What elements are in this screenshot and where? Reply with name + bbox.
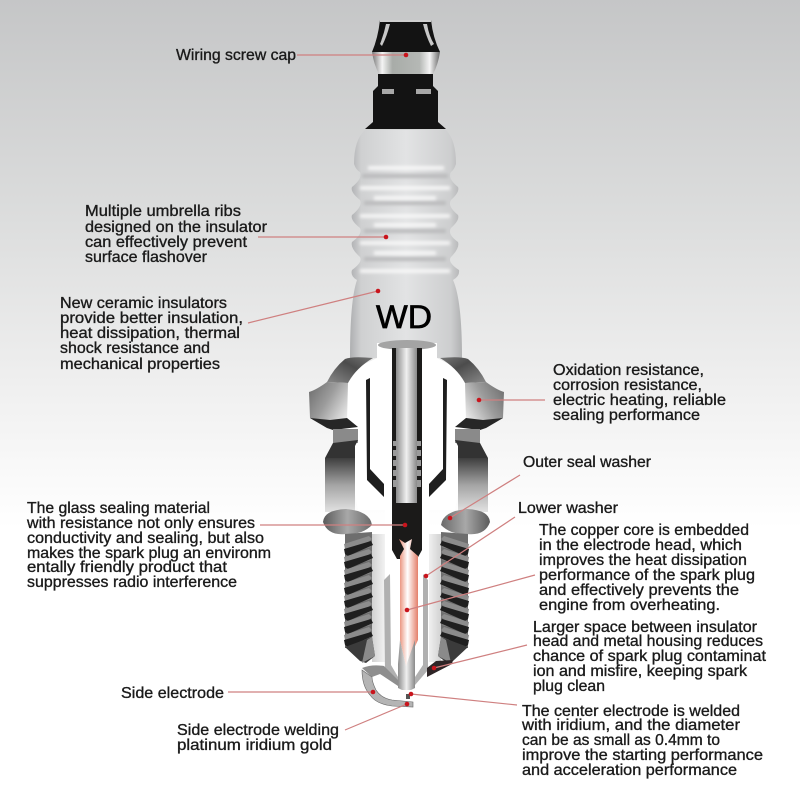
spark plug illustration — [309, 20, 504, 707]
funnel base left — [362, 665, 398, 686]
label: copper core — [539, 522, 755, 614]
label: glass sealing material: The glass sealing material — [27, 500, 210, 517]
label: oxidation resistance: Oxidation resistance, — [553, 362, 704, 379]
label: ceramic insulators: shock resistance and — [60, 340, 210, 357]
label: glass sealing material: suppresses radio interference — [27, 574, 237, 591]
housing lower right chamber — [427, 660, 453, 677]
label: wiring screw cap: Wiring screw cap — [176, 47, 296, 64]
white core insulator — [343, 343, 470, 510]
label: larger space — [533, 619, 767, 695]
side electrode — [362, 670, 413, 707]
label: oxidation resistance — [553, 362, 726, 424]
label: larger space: Larger space between insulator — [533, 619, 758, 636]
label: copper core: and effectively prevents the — [539, 582, 739, 599]
label: ceramic insulators — [60, 295, 243, 373]
center electrode column — [392, 348, 422, 559]
label: side electrode welding: platinum iridium gold — [177, 737, 332, 754]
metal housing right half — [428, 357, 504, 663]
label: umbrella ribs — [85, 203, 268, 266]
label: oxidation resistance: sealing performance — [553, 407, 700, 424]
label: glass sealing material: entally friendly product that — [27, 559, 228, 576]
label: ceramic insulators: mechanical properties — [60, 356, 220, 373]
label: side electrode: Side electrode — [121, 685, 224, 702]
copper core — [399, 539, 418, 666]
label: umbrella ribs: Multiple umbrella ribs — [85, 203, 241, 220]
label: larger space: ion and misfire, keeping spark — [533, 663, 748, 680]
label: larger space: plug clean — [533, 678, 605, 695]
label: center electrode — [521, 703, 763, 779]
label: umbrella ribs: designed on the insulator — [85, 219, 268, 236]
label: center electrode: The center electrode is welded — [522, 703, 740, 720]
label: center electrode: with iridium, and the diameter — [521, 717, 741, 734]
label: copper core: performance of the spark plug — [539, 567, 755, 584]
label: larger space: head and metal housing reduces — [533, 633, 763, 650]
WD mark: WD — [376, 299, 432, 335]
label: side electrode welding: Side electrode welding — [177, 722, 339, 739]
label: center electrode: improve the starting performance — [522, 747, 763, 764]
label: ceramic insulators: provide better insulation, — [60, 310, 243, 327]
insulator highlights — [360, 145, 450, 296]
label: glass sealing material: with resistance not only ensures — [26, 515, 255, 532]
insulator nose — [384, 574, 428, 685]
label: glass sealing material: makes the spark plug an environm — [27, 545, 271, 562]
leader lines and dots — [228, 53, 545, 730]
label: oxidation resistance: electric heating, reliable — [553, 392, 726, 409]
core top cap — [378, 340, 436, 350]
label: side electrode welding — [177, 722, 339, 754]
label: center electrode: can be as small as 0.4mm to — [522, 732, 720, 749]
label: ceramic insulators: New ceramic insulators — [60, 295, 227, 312]
label: lower washer: Lower washer — [518, 500, 619, 517]
label: copper core: engine from overheating. — [539, 597, 720, 614]
label: umbrella ribs: can effectively prevent — [85, 234, 248, 251]
label: center electrode: and acceleration performance — [522, 762, 737, 779]
label: copper core: The copper core is embedded — [539, 522, 749, 539]
label: glass sealing material: conductivity and sealing, but also — [27, 530, 264, 547]
label: glass sealing material — [26, 500, 271, 591]
label: outer seal washer: Outer seal washer — [523, 454, 652, 471]
label: copper core: improves the heat dissipation — [539, 552, 747, 569]
label: umbrella ribs: surface flashover — [85, 249, 208, 266]
label: ceramic insulators: heat dissipation, thermal — [60, 325, 240, 342]
ribbed ceramic insulator — [350, 130, 462, 358]
wiring screw cap — [365, 20, 446, 129]
label: copper core: in the electrode head, which — [539, 537, 742, 554]
label: larger space: chance of spark plug contaminat — [533, 648, 767, 665]
label: oxidation resistance: corrosion resistance, — [553, 377, 702, 394]
metal housing left half — [309, 357, 385, 663]
center electrode tip — [398, 640, 415, 699]
lower white core — [385, 500, 429, 665]
